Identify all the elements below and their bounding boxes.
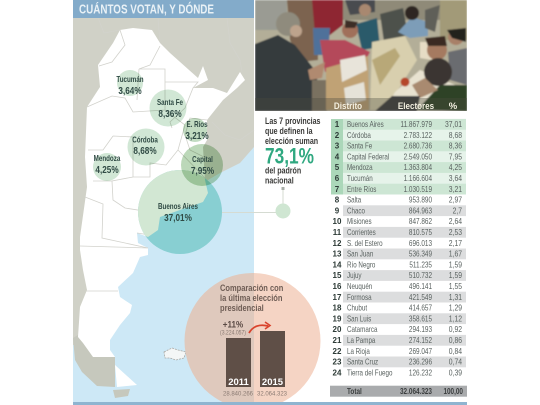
district column: La Pampa <box>347 336 375 345</box>
arrow <box>249 325 268 333</box>
percent column: 1,59 <box>449 271 462 280</box>
callout: 73,1%: Las 7 provincias <box>265 116 321 126</box>
percent column: 1,29 <box>449 303 462 313</box>
bottom bar <box>73 402 467 405</box>
rank column: 11 <box>333 228 342 237</box>
callout: 73,1%: del padrón <box>265 166 301 176</box>
rank column: 12 <box>333 239 342 248</box>
label: buenos aires: Buenos Aires <box>158 202 198 211</box>
connector dot <box>276 187 290 218</box>
district column: Tucumán <box>347 174 373 183</box>
circle: capital <box>181 144 223 186</box>
electors column: 696.013 <box>409 238 432 248</box>
percent column: 1,67 <box>449 249 462 259</box>
label: entre rios <box>185 120 209 141</box>
percent column: 3,21 <box>449 184 462 194</box>
bar values: 28.840.266 <box>223 392 254 398</box>
district column: Neuquén <box>347 282 372 291</box>
comparison title: la última elección <box>220 292 282 303</box>
electors column: 2.783.122 <box>404 130 432 140</box>
percent column: 0,84 <box>449 346 462 356</box>
percent column: 2,64 <box>449 217 462 226</box>
rank column: 5 <box>335 163 340 172</box>
label: santa fe <box>157 98 183 119</box>
callout: 73,1%: nacional <box>265 176 294 186</box>
district column: Santa Fe <box>347 142 372 151</box>
electors column: 496.141 <box>409 281 432 291</box>
sea <box>73 147 254 402</box>
electors column: 536.349 <box>409 249 432 259</box>
electors column: 1.166.604 <box>404 173 432 183</box>
table header band: Electores <box>398 100 434 111</box>
district column: Chaco <box>347 207 365 216</box>
electors column: 1.363.804 <box>404 162 432 172</box>
label: entre rios: 3,21% <box>185 129 209 141</box>
district column: San Luis <box>347 315 372 324</box>
connector line <box>222 212 283 214</box>
district column: Catamarca <box>347 326 377 334</box>
percent column: 37,01 <box>445 119 462 129</box>
falkland islands <box>164 348 186 360</box>
electors column: 294.193 <box>409 324 432 334</box>
total row: Total <box>347 386 362 396</box>
rank column: 18 <box>333 304 342 313</box>
callout: 73,1%: elección suman <box>265 136 318 146</box>
district column: Río Negro <box>347 261 375 270</box>
label: santa fe: 8,36% <box>158 107 182 119</box>
bar 2011 <box>226 338 251 387</box>
label: mendoza: Mendoza <box>94 154 121 163</box>
table header band: Distrito <box>334 100 363 111</box>
circle: cordoba <box>128 128 164 166</box>
map panel <box>73 18 254 402</box>
district column: Jujuy <box>347 272 362 280</box>
rank column <box>333 120 342 377</box>
total row <box>330 386 467 397</box>
neighbouring borders <box>98 18 254 140</box>
electors column: 511.235 <box>409 260 432 270</box>
callout: 73,1% <box>265 116 321 186</box>
rank column: 15 <box>333 271 342 280</box>
comparison circle: 32.064.323 <box>257 392 288 398</box>
rank column: 20 <box>333 325 342 334</box>
electors column: 810.575 <box>409 227 432 237</box>
percent column: 2,17 <box>449 238 462 248</box>
electors column: 274.152 <box>409 335 432 345</box>
comparison title: presidencial <box>220 302 264 313</box>
percent column: 1,59 <box>449 260 462 270</box>
district column: Santa Cruz <box>347 358 379 367</box>
district column: Mendoza <box>347 164 373 172</box>
rank column: 17 <box>333 293 342 302</box>
label: mendoza <box>94 154 121 175</box>
label: capital: Capital <box>192 155 213 164</box>
comparison title <box>220 282 283 313</box>
electors column: 2.549.050 <box>404 152 432 162</box>
rank column: 23 <box>333 358 342 367</box>
circle: santa fe <box>150 90 186 126</box>
electors column: 236.296 <box>409 357 432 367</box>
district column: San Juan <box>347 250 373 259</box>
rank column: 7 <box>335 185 340 194</box>
circle: entre rios <box>183 118 207 142</box>
district column: Formosa <box>347 293 372 302</box>
electors column: 126.232 <box>409 368 432 378</box>
rank column: 13 <box>333 250 342 259</box>
argentina landmass <box>78 28 245 357</box>
label: cordoba: Córdoba <box>132 136 159 145</box>
percent column: 2,7 <box>453 206 462 216</box>
district column: La Rioja <box>347 347 370 356</box>
percent column: 0,86 <box>449 335 462 345</box>
province borders <box>80 30 207 291</box>
percent column: 0,92 <box>449 325 462 334</box>
comparison circle: 2011 <box>228 377 250 388</box>
percent column: 0,74 <box>449 357 462 367</box>
electors column: 269.047 <box>409 346 432 356</box>
percent column: 1,31 <box>449 292 462 302</box>
electors column: 358.615 <box>409 314 432 324</box>
growth label: (3.224.057) <box>220 330 246 337</box>
circle: tucuman <box>117 70 143 96</box>
comparison title: Comparación con <box>220 282 283 293</box>
electors column: 11.867.979 <box>400 119 432 129</box>
comparison circle <box>184 273 320 405</box>
electors column: 414.657 <box>409 303 432 313</box>
growth label <box>220 319 246 337</box>
label: tucuman: 3,64% <box>118 84 142 96</box>
bar 2015 <box>260 331 285 387</box>
label: tucuman: Tucumán <box>116 75 144 84</box>
rank column: 9 <box>335 206 340 215</box>
circle: buenos aires <box>138 170 222 254</box>
callout: 73,1%: que definen la <box>265 126 313 136</box>
label: capital <box>191 155 215 176</box>
rank column: 22 <box>333 347 342 356</box>
percent column: 4,25 <box>449 163 462 172</box>
percent column: 8,68 <box>449 130 462 140</box>
district column: Corrientes <box>347 228 376 237</box>
label: cordoba <box>132 136 159 156</box>
grey rows <box>343 205 466 367</box>
table header band <box>255 98 467 112</box>
district column <box>347 120 392 378</box>
label: entre rios: E. Ríos <box>186 120 208 129</box>
rank column: 19 <box>333 314 342 323</box>
rank column: 16 <box>333 282 342 291</box>
label: capital: 7,95% <box>191 164 215 176</box>
chilean islands <box>73 335 130 398</box>
total row: 100,00 <box>443 386 463 396</box>
label: buenos aires <box>158 202 198 223</box>
electors column: 953.890 <box>409 195 432 205</box>
tierra del fuego <box>115 365 137 387</box>
label: tucuman <box>116 75 144 96</box>
rank column: 8 <box>335 196 340 205</box>
label: cordoba: 8,68% <box>133 144 157 156</box>
table: electors by district <box>330 119 467 397</box>
electors column <box>400 119 432 378</box>
district column: Córdoba <box>347 131 371 140</box>
percent column: 2,97 <box>449 195 462 205</box>
percent column: 8,36 <box>449 141 462 151</box>
district column: Chubut <box>347 304 367 313</box>
rank column: 6 <box>335 174 340 183</box>
rank column: 2 <box>335 131 340 140</box>
growth label: +11% <box>223 319 243 330</box>
district column: Buenos Aires <box>347 120 384 129</box>
header: cuántos votan: CUÁNTOS VOTAN, Y DÓNDE <box>79 2 214 16</box>
electors column: 421.549 <box>409 292 432 302</box>
rank column: 4 <box>335 152 340 161</box>
percent column: 0,39 <box>449 368 462 378</box>
district column: S. del Estero <box>347 239 383 248</box>
percent column: 3,64 <box>449 173 462 183</box>
circle: mendoza <box>93 153 121 181</box>
total row: 32.064.323 <box>400 386 432 396</box>
label: santa fe: Santa Fe <box>157 98 183 107</box>
district column: Misiones <box>347 218 372 226</box>
electors column: 847.862 <box>409 216 432 226</box>
electors column: 510.732 <box>409 270 432 280</box>
rank column: 1 <box>335 120 340 129</box>
rank column: 14 <box>333 260 342 269</box>
percent column: 1,12 <box>449 314 462 324</box>
rank column: 21 <box>333 336 342 345</box>
electors column: 1.030.519 <box>404 184 432 194</box>
district column: Salta <box>347 196 361 205</box>
table header band: % <box>449 101 458 112</box>
rank column: 10 <box>333 217 342 226</box>
district column: Entre Ríos <box>347 185 377 194</box>
photo: voters at polling station <box>255 0 467 112</box>
comparison circle: 2015 <box>262 377 284 388</box>
green rows <box>331 119 466 194</box>
callout: 73,1%: 73,1% <box>265 144 314 168</box>
percent column: 1,55 <box>449 281 462 291</box>
district column: Capital Federal <box>347 153 390 162</box>
electors column: 864.963 <box>409 206 432 216</box>
electors column: 2.680.736 <box>404 141 432 151</box>
label: mendoza: 4,25% <box>95 163 119 175</box>
label: buenos aires: 37,01% <box>164 211 192 223</box>
province circles <box>93 70 223 254</box>
rank column: 3 <box>335 142 340 151</box>
district column: Tierra del Fuego <box>347 369 392 378</box>
percent column <box>445 119 462 378</box>
percent column: 7,95 <box>449 152 462 162</box>
rank column: 24 <box>333 368 342 377</box>
percent column: 2,53 <box>449 227 462 237</box>
